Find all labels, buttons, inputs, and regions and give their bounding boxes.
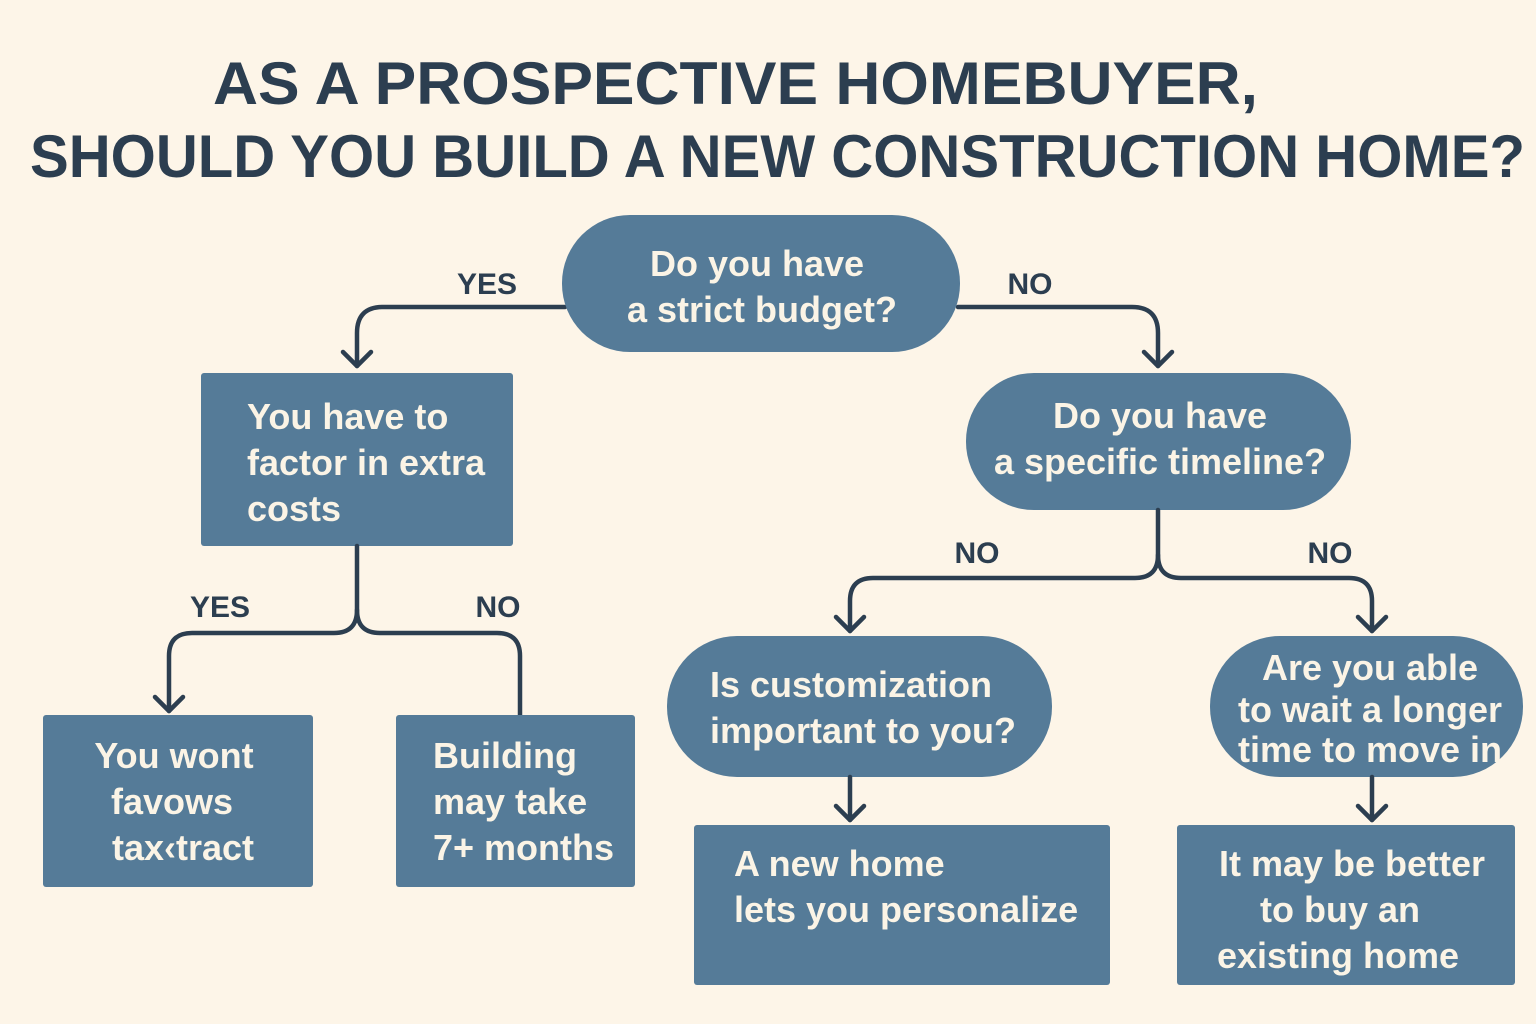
box: existing home: to buy an [1260,889,1420,930]
title: SHOULD YOU BUILD A NEW CONSTRUCTION HOME? [30,123,1525,190]
box: extra costs: factor in extra [247,442,486,483]
decision: wait longer [1210,636,1523,777]
decision: customization: important to you? [710,710,1016,751]
box: 7+ months [396,715,635,887]
box: existing home [1177,825,1515,985]
label: NO right-left: NO [954,537,1000,570]
decision: wait longer: to wait a longer [1238,689,1502,730]
box: 7+ months: may take [433,781,587,822]
box: tax: favows [111,781,233,822]
decision: strict budget [562,215,960,352]
box: personalize [694,825,1110,985]
box: tax: tax‹tract [112,827,254,868]
box: existing home: existing home [1217,935,1459,976]
label: NO left: NO [476,591,520,624]
title: AS A PROSPECTIVE HOMEBUYER, [213,50,1258,117]
decision: specific timeline [966,373,1351,510]
decision: strict budget: Do you have [650,243,864,284]
decision: strict budget: a strict budget? [627,289,897,330]
box: tax [43,715,313,887]
arrows down to outcomes [836,777,1386,820]
box: 7+ months: Building [433,735,577,776]
title [30,50,1525,190]
decision: wait longer: time to move in [1238,729,1502,770]
label: NO top: NO [1008,268,1052,301]
connectors: left branch [155,546,520,715]
decision: wait longer: Are you able [1262,647,1478,688]
decision: customization: Is customization [710,664,992,705]
label: NO right-right: NO [1308,537,1352,570]
box: existing home: It may be better [1219,843,1485,884]
label: YES top: YES [457,268,517,301]
decision: specific timeline: Do you have [1053,395,1267,436]
label: YES left: YES [190,591,250,624]
box: extra costs: You have to [247,396,448,437]
box: 7+ months: 7+ months [433,827,614,868]
box: tax: You wont [94,735,254,776]
box: personalize: lets you personalize [734,889,1078,930]
box: extra costs: costs [247,488,341,529]
decision: specific timeline: a specific timeline? [994,441,1326,482]
connectors: root branches [343,307,1172,366]
box: extra costs [201,373,513,546]
connectors: right branch [836,510,1386,631]
box: personalize: A new home [734,843,945,884]
decision: customization [667,636,1052,777]
